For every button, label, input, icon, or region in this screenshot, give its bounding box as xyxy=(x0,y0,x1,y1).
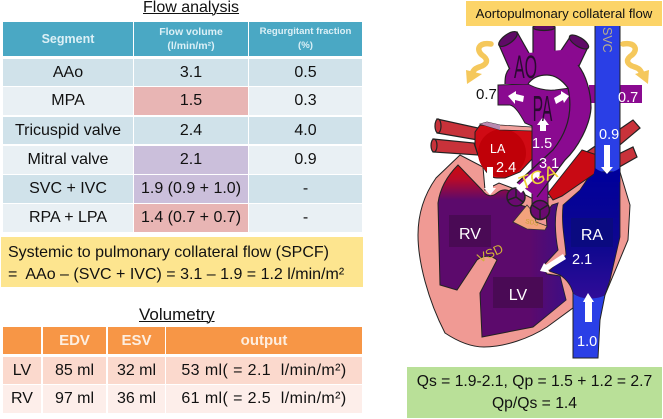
table: flow analysis: 1.9 (0.9 + 1.0) xyxy=(141,180,241,197)
vessel labels: PA xyxy=(533,89,553,129)
flow numbers: 2.4 xyxy=(496,160,516,176)
pulmonary artery with branches xyxy=(498,84,642,170)
table: flow analysis: (l/min/m²) xyxy=(167,40,215,52)
table: flow analysis: 0.3 xyxy=(294,92,317,109)
table: flow analysis: Segment xyxy=(42,32,94,46)
flow numbers: 2.1 xyxy=(572,252,592,268)
table: volumetry: 36 ml xyxy=(117,390,156,407)
left collateral value: 0.7 xyxy=(476,86,497,103)
aorta branches xyxy=(496,24,591,70)
TGA label: TGA xyxy=(517,161,561,195)
callout: Qs Qp xyxy=(407,367,662,418)
vessel labels: AO xyxy=(514,50,537,86)
table: flow analysis xyxy=(3,22,362,232)
table: flow analysis: SVC + IVC xyxy=(29,180,107,197)
wavy collateral arrow right xyxy=(623,44,649,84)
table: volumetry xyxy=(3,327,362,413)
left atrium xyxy=(475,122,533,178)
table: volumetry: EDV xyxy=(59,332,90,349)
flow numbers xyxy=(490,90,638,350)
title: Volumetry: Volumetry xyxy=(139,305,215,324)
table: flow analysis: MPA xyxy=(51,92,85,109)
pulmonary veins left xyxy=(431,119,478,155)
banner: aortopulmonary collateral flow: Aortopulmonary collateral flow xyxy=(476,6,652,21)
chamber labels: RA xyxy=(581,227,603,244)
ventricular cavity xyxy=(438,165,566,337)
pulmonary veins right xyxy=(575,120,640,178)
table: volumetry: output xyxy=(241,332,287,349)
table: volumetry: 97 ml xyxy=(55,390,94,407)
table: flow analysis: Regurgitant fraction xyxy=(260,26,351,37)
flow numbers: 3.1 xyxy=(539,156,559,172)
table: flow analysis: Tricuspid valve xyxy=(15,122,121,138)
chamber labels xyxy=(449,215,613,308)
callout: SPCF formula xyxy=(1,237,363,287)
conal septum xyxy=(513,205,547,230)
table: flow analysis: 0.9 xyxy=(294,151,317,168)
pulmonary trunk lower xyxy=(532,168,548,206)
callout: Qs Qp: Qs = 1.9-2.1, Qp = 1.5 + 1.2 = 2.7 xyxy=(417,372,652,390)
valves xyxy=(507,188,550,220)
table: flow analysis: (%) xyxy=(298,40,313,51)
table: flow analysis: 2.4 xyxy=(180,122,202,138)
table: flow analysis: - xyxy=(303,180,308,197)
callout: SPCF formula: = AAo – (SVC + IVC) = 3.1 – 1.9 = 1.2 l/min/m² xyxy=(8,266,344,283)
SDS label: SDS xyxy=(525,218,540,228)
callout: SPCF formula: Systemic to pulmonary collateral flow (SPCF) xyxy=(8,244,329,261)
flow numbers: 0.7 xyxy=(618,90,638,106)
table: flow analysis: 1.5 xyxy=(180,92,202,109)
callout: Qs Qp: Qp/Qs = 1.4 xyxy=(492,394,577,412)
IVC xyxy=(573,293,605,358)
table: flow analysis: 3.1 xyxy=(180,64,202,80)
heart muscle xyxy=(418,155,630,347)
banner: aortopulmonary collateral flow xyxy=(466,1,662,26)
white flow arrows xyxy=(484,91,613,322)
table: volumetry: LV xyxy=(13,362,31,378)
table: flow analysis: - xyxy=(303,209,308,226)
right-side red chamber xyxy=(548,150,597,200)
table: flow analysis: Flow volume xyxy=(159,26,223,38)
table: flow analysis: AAo xyxy=(53,64,83,80)
flow numbers: 1.0 xyxy=(577,334,597,350)
table: flow analysis: 2.1 xyxy=(180,151,202,168)
table: flow analysis: RPA + LPA xyxy=(29,209,107,226)
aortic arch xyxy=(505,50,591,197)
wavy collateral arrow left xyxy=(466,44,491,84)
table: flow analysis: 4.0 xyxy=(294,122,317,138)
table: volumetry: 32 ml xyxy=(117,362,156,378)
table: flow analysis: 0.5 xyxy=(294,64,317,80)
flow numbers: 1.5 xyxy=(532,136,552,152)
VSD label: VSD xyxy=(475,241,505,266)
flow numbers: 0.9 xyxy=(599,127,619,143)
vessel labels xyxy=(514,50,553,129)
table: volumetry: 61 ml( = 2.5 l/min/m²) xyxy=(181,390,347,407)
table: volumetry: 85 ml xyxy=(55,362,94,378)
table: volumetry: RV xyxy=(11,390,33,407)
SVC xyxy=(592,24,620,182)
chamber labels: RV xyxy=(459,226,481,243)
right atrium xyxy=(549,172,620,299)
flow numbers: LA xyxy=(490,142,506,156)
chamber labels: LV xyxy=(509,287,528,304)
table: volumetry: ESV xyxy=(121,332,152,349)
table: volumetry: 53 ml( = 2.1 l/min/m²) xyxy=(181,362,347,378)
SVC label: SVC xyxy=(600,27,614,53)
table: flow analysis: 1.4 (0.7 + 0.7) xyxy=(141,209,241,226)
table: flow analysis: Mitral valve xyxy=(28,151,108,168)
